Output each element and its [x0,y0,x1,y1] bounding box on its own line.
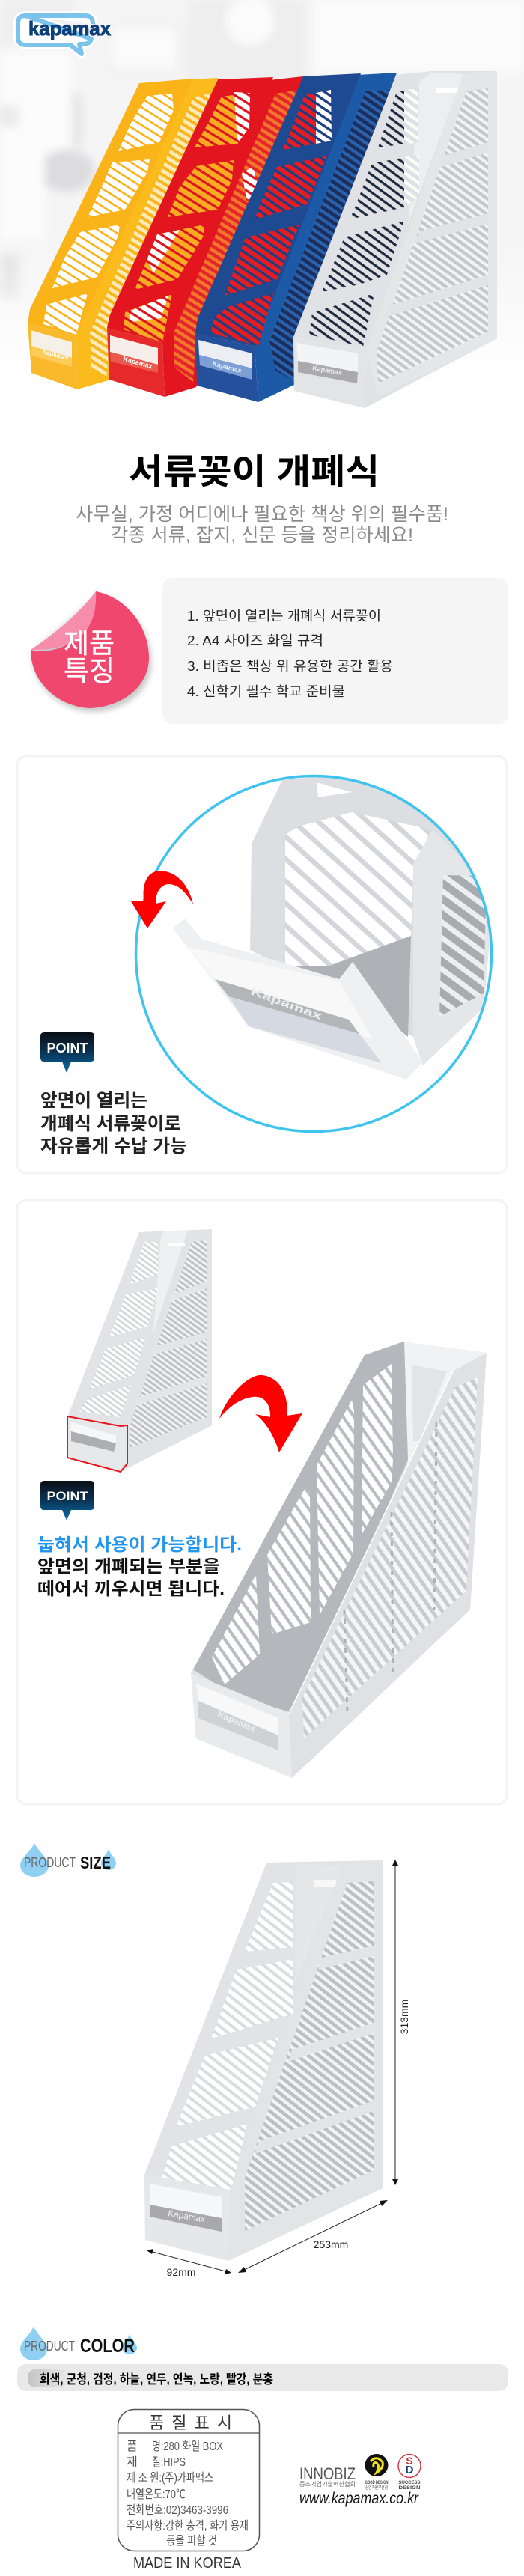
heading: product color [20,2327,137,2360]
feature items: 3. 비좁은 책상 위 유용한 공간 활용 [187,659,393,674]
sticker text [64,628,115,686]
panel: feature list [162,578,508,724]
red file holder [107,76,303,397]
point badge: POINT [46,1489,88,1503]
colour list bar [17,2364,508,2391]
heading: product size: SIZE [80,1853,111,1872]
feature items: 2. A4 사이즈 화일 규격 [187,633,323,648]
quality rows [127,2440,249,2548]
point text: 떼어서 끼우시면 됩니다. [37,1579,225,1598]
quality rows: 품 [127,2440,138,2453]
point text [37,1535,242,1598]
subtitle: 사무실, 가정 어디에나 필요한 책상 위의 필수품! [76,504,448,525]
label text: Kapamax [216,1709,258,1734]
point badge: POINT [46,1041,88,1056]
label text: Kapamax [167,2208,206,2225]
sticker text: 제품 [64,628,115,659]
point text: 눕혀서 사용이 가능합니다. [37,1535,242,1554]
dimension: width [147,2249,231,2278]
point text: 개폐식 서류꽂이로 [40,1114,181,1134]
quality rows: 내열온도:70℃ [127,2488,186,2501]
point text: 자유롭게 수납 가능 [40,1136,187,1157]
heading: product color: COLOR [80,2336,135,2357]
dimension: depth: 253mm [314,2238,348,2250]
good design logo: 산업자원부선정 [365,2485,388,2491]
point text: 앞면의 개폐되는 부분을 [37,1556,220,1576]
quality rows: 제 조 원:(주)카파맥스 [127,2471,213,2485]
subtitle: 각종 서류, 잡지, 신문 등을 정리하세요! [111,525,413,546]
quality rows: 등을 피할 것 [166,2534,217,2548]
feature items [187,609,393,699]
small upright file holder [67,1229,212,1472]
dimension: height [392,1860,410,2185]
label text: Kapamax [41,348,70,362]
colour list text: 회색, 군청, 검정, 하늘, 연두, 연녹, 노랑, 빨강, 분홍 [40,2372,273,2387]
logo wordmark: kapamax [28,17,112,40]
dimension: height: 313mm [398,2000,410,2034]
quality rows: 질:HIPS [152,2455,186,2469]
label text: Kapamax [122,355,153,370]
product size drawing [144,1860,410,2278]
success design logo: S [406,2455,413,2467]
point text [40,1091,187,1157]
arrow: red curved [131,871,193,928]
point badge [40,1032,94,1073]
circular product close-up [136,771,494,1132]
large tilted file holder [191,1342,487,1778]
panel: front opening [17,756,507,1173]
subtitle [76,504,448,546]
red outline on flap [67,1416,127,1472]
innobiz logo: INNOBIZ [299,2464,356,2483]
quality rows: 명:280 화일 BOX [152,2440,223,2453]
success design logo [398,2454,421,2491]
feature items: 1. 앞면이 열리는 개폐식 서류꽂이 [187,609,381,624]
label text: Kapamax [211,359,243,374]
panel: laying the holder down [17,1200,507,1804]
sticker: product features [31,591,151,712]
innobiz logo: 중소기업기술혁신협회 [299,2480,356,2488]
product photo: four coloured file holders [28,71,497,408]
title: 서류꽂이 개폐식 [129,452,380,491]
point text: 앞면이 열리는 [40,1091,147,1111]
heading: product size: PRODUCT [24,1855,76,1870]
grey file holder [144,1860,383,2261]
arrow: red curved [219,1375,302,1452]
good design logo: GOOD DESIGN [365,2481,388,2485]
feature items: 4. 신학기 필수 학교 준비물 [187,684,345,699]
blue file holder [195,73,397,402]
website: www.kapamax.co.kr [299,2490,419,2507]
label text: Kapamax [312,364,343,377]
good design logo [365,2454,388,2491]
flap label text: Kapamax [249,985,324,1022]
grey file holder [293,71,497,408]
quality label box [118,2409,259,2551]
made in korea: MADE IN KOREA [133,2555,242,2572]
logo: kapamax speech bubble [18,16,112,54]
innobiz logo [299,2464,356,2488]
yellow file holder [28,78,218,389]
quality rows: 재 [127,2455,138,2469]
heading: product color: PRODUCT [24,2339,75,2354]
success design logo: DESIGN [398,2485,421,2491]
hero background [0,0,524,419]
heading: product size [20,1843,116,1877]
success design logo: SUCCESS [398,2480,421,2485]
quality rows: 주의사항:강한 충격, 화기 용재 [127,2519,249,2533]
dimension: width: 92mm [167,2266,195,2278]
quality title: 품 질 표 시 [149,2414,232,2432]
sticker text: 특징 [64,656,115,686]
certification logos [299,2454,421,2507]
point badge [40,1481,94,1520]
dimension: depth [238,2200,388,2273]
success design logo: D [406,2464,414,2476]
quality rows: 전화번호:02)3463-3996 [127,2503,228,2517]
